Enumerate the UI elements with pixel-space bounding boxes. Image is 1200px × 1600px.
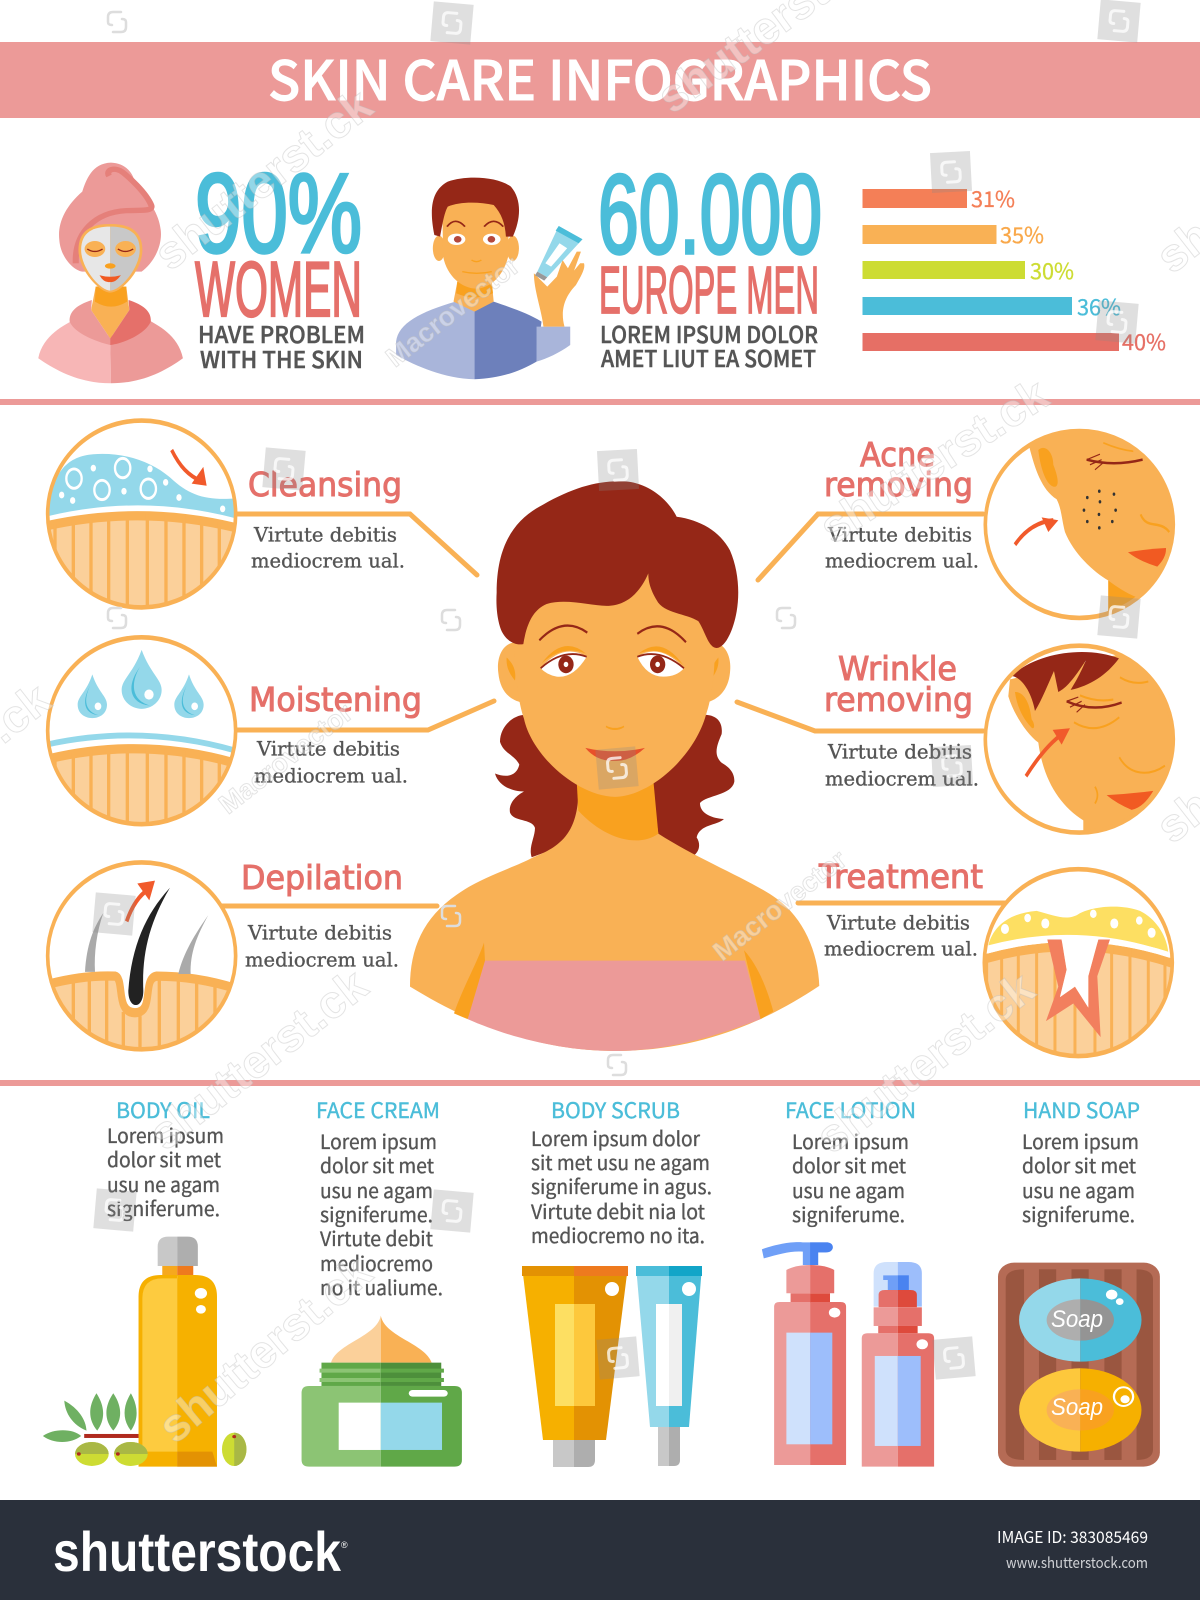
- product: face cream: [302, 1095, 462, 1467]
- text: Depilation description: [245, 920, 399, 972]
- watermarks: Macrovector: [707, 844, 853, 967]
- stat: 60.000 Europe men: 60.000: [598, 152, 822, 277]
- heading: Depilation: Depilation: [241, 858, 403, 897]
- watermarks: shutterst.ck: [139, 958, 377, 1160]
- icon: yellow tube: [522, 1266, 628, 1467]
- watermarks: shutterst.ck: [806, 961, 1044, 1163]
- icon: water drops on skin: [47, 637, 237, 831]
- text: hand soap description: signiferume.: [1022, 1199, 1135, 1228]
- footer bar: shutterstock: [53, 1520, 342, 1583]
- icon: soap bars on dish: [998, 1263, 1160, 1467]
- heading: face lotion: FACE LOTION: [785, 1095, 916, 1125]
- text: face cream description: Lorem ipsum: [320, 1126, 437, 1155]
- stat: 90 percent women: HAVE PROBLEM: [198, 316, 365, 350]
- text: face cream description: [320, 1126, 443, 1301]
- text: hand soap description: usu ne agam: [1022, 1175, 1135, 1204]
- text: body oil description: Lorem ipsum: [107, 1120, 224, 1149]
- text: hand soap description: Lorem ipsum: [1022, 1126, 1139, 1155]
- text: Acne description: Virtute debitis: [827, 522, 972, 546]
- product: body scrub: [522, 1095, 712, 1467]
- title banner: SKIN CARE INFOGRAPHICS: [268, 37, 932, 116]
- text: Wrinkle description: mediocrem ual.: [825, 766, 979, 790]
- icon: woman with face mask: [38, 163, 183, 383]
- text: EUROPE MEN: [599, 253, 819, 328]
- heading: face cream: FACE CREAM: [316, 1095, 440, 1125]
- bar chart: 31%: [971, 182, 1015, 214]
- text: Treatment description: mediocrem ual.: [824, 936, 978, 960]
- text: body oil description: dolor sit met: [107, 1144, 221, 1173]
- text: face lotion description: usu ne agam: [792, 1175, 905, 1204]
- panel: depilation: [47, 858, 403, 1054]
- panel: wrinkle removing: [824, 641, 1177, 839]
- icon: cream jar: [302, 1316, 462, 1467]
- stat: 90 percent women: WITH THE SKIN: [200, 341, 363, 375]
- stat: 60.000 Europe men: AMET LIUT EA SOMET: [601, 340, 816, 374]
- icon: oil bottle with olives: [43, 1237, 246, 1467]
- product: face lotion: [762, 1095, 934, 1467]
- heading: Cleansing: Cleansing: [248, 465, 402, 504]
- watermarks: shutterst.ck: [148, 1245, 381, 1453]
- product: body oil: [43, 1095, 246, 1467]
- text: soap labels: [1051, 1306, 1103, 1421]
- text: Treatment description: [824, 910, 978, 960]
- heading: Acne removing: [824, 435, 973, 504]
- text: body scrub description: Lorem ipsum dolor: [531, 1123, 700, 1152]
- central woman portrait: [410, 481, 819, 1051]
- bar chart: 36%: [1077, 290, 1121, 322]
- watermarks: Macrovector: [213, 697, 359, 820]
- text: face cream description: Virtute debit: [320, 1223, 433, 1252]
- heading: Wrinkle removing: [824, 649, 973, 719]
- text: Cleansing description: Virtute debitis: [253, 522, 397, 546]
- text: soap labels: Soap: [1051, 1394, 1103, 1421]
- text: face lotion description: [792, 1126, 909, 1228]
- text: face cream description: mediocremo: [320, 1248, 433, 1277]
- watermarks: Macrovector: [380, 250, 526, 373]
- icon: face with wrinkles: [985, 641, 1177, 839]
- text: face cream description: no it ualiume.: [320, 1272, 443, 1301]
- bar chart: [862, 182, 1166, 357]
- text: body oil description: signiferume.: [107, 1193, 220, 1222]
- text: Cleansing description: [251, 522, 405, 572]
- text: body scrub description: signiferume in agus.: [531, 1171, 712, 1200]
- heading: Treatment: Treatment: [818, 857, 983, 896]
- stat: 90 percent women: WOMEN: [195, 245, 362, 333]
- text: face cream description: signiferume.: [320, 1199, 433, 1228]
- footer bar: [0, 1500, 1200, 1600]
- text: face cream description: dolor sit met: [320, 1150, 434, 1179]
- text: body scrub description: Virtute debit nia lot: [531, 1196, 705, 1225]
- text: hand soap description: [1022, 1126, 1139, 1228]
- text: Moistening description: Virtute debitis: [256, 736, 400, 760]
- stat: 90 percent women: [195, 151, 365, 375]
- text: Treatment description: Virtute debitis: [826, 910, 970, 934]
- text: Acne description: mediocrem ual.: [825, 548, 979, 572]
- heading: body oil: BODY OIL: [116, 1095, 210, 1125]
- text: body scrub description: [531, 1123, 712, 1249]
- text: face lotion description: signiferume.: [792, 1199, 905, 1228]
- icon: lotion pump bottles: [762, 1242, 934, 1467]
- text: Moistening description: [254, 736, 408, 788]
- icon: cleansing foam on skin: [47, 421, 237, 612]
- text: body scrub description: mediocremo no ita.: [531, 1220, 705, 1249]
- icon: skin wound treatment: [983, 869, 1173, 1058]
- watermarks: shutterst.ck: [810, 368, 1057, 553]
- text: Wrinkle description: [825, 740, 979, 790]
- footer bar: www.shutterstock.com: [1006, 1552, 1148, 1573]
- heading: Wrinkle removing: Wrinkle: [838, 649, 957, 688]
- text: body scrub description: sit met usu ne agam: [531, 1147, 710, 1176]
- bar chart: 30%: [1030, 254, 1074, 286]
- text: body oil description: [107, 1120, 224, 1222]
- title banner: [0, 37, 1200, 118]
- text: Depilation description: Virtute debitis: [247, 920, 392, 944]
- heading: Wrinkle removing: removing: [824, 680, 973, 719]
- footer bar: IMAGE ID: 383085469: [997, 1524, 1148, 1548]
- heading: hand soap: HAND SOAP: [1023, 1095, 1140, 1125]
- panel: treatment: [818, 857, 1173, 1058]
- heading: Acne removing: Acne: [860, 435, 935, 474]
- bar chart: 35%: [1000, 218, 1044, 250]
- stat: 60.000 Europe men: [598, 152, 822, 374]
- panel: cleansing: [47, 421, 405, 612]
- connector lines: [222, 514, 1005, 906]
- heading: Moistening: Moistening: [249, 680, 422, 719]
- text: Wrinkle description: Virtute debitis: [827, 740, 972, 764]
- text: soap labels: Soap: [1051, 1306, 1103, 1333]
- footer bar: ®: [341, 1540, 348, 1550]
- text: face cream description: usu ne agam: [320, 1175, 433, 1204]
- text: Cleansing description: mediocrem ual.: [251, 548, 405, 572]
- text: Depilation description: mediocrem ual.: [245, 948, 399, 972]
- heading: Acne removing: removing: [824, 465, 973, 504]
- bar chart: 40%: [1122, 325, 1166, 357]
- panel: moistening: [47, 637, 422, 831]
- icon: hair follicle: [47, 862, 237, 1054]
- icon: man holding cream tube: [396, 178, 584, 379]
- product: hand soap: [998, 1095, 1160, 1467]
- text: Acne description: [825, 522, 979, 572]
- stat: 90 percent women: 90%: [195, 151, 362, 276]
- watermarks: shutterst.ck: [144, 78, 382, 280]
- text: face lotion description: Lorem ipsum: [792, 1126, 909, 1155]
- icon: face with acne: [985, 423, 1177, 620]
- text: Moistening description: mediocrem ual.: [254, 764, 408, 788]
- text: body oil description: usu ne agam: [107, 1169, 220, 1198]
- stat: 60.000 Europe men: LOREM IPSUM DOLOR: [600, 316, 818, 350]
- text: hand soap description: dolor sit met: [1022, 1150, 1136, 1179]
- text: face lotion description: dolor sit met: [792, 1150, 906, 1179]
- panel: acne removing: [824, 423, 1177, 620]
- heading: body scrub: BODY SCRUB: [551, 1095, 680, 1125]
- icon: blue tube: [636, 1266, 702, 1466]
